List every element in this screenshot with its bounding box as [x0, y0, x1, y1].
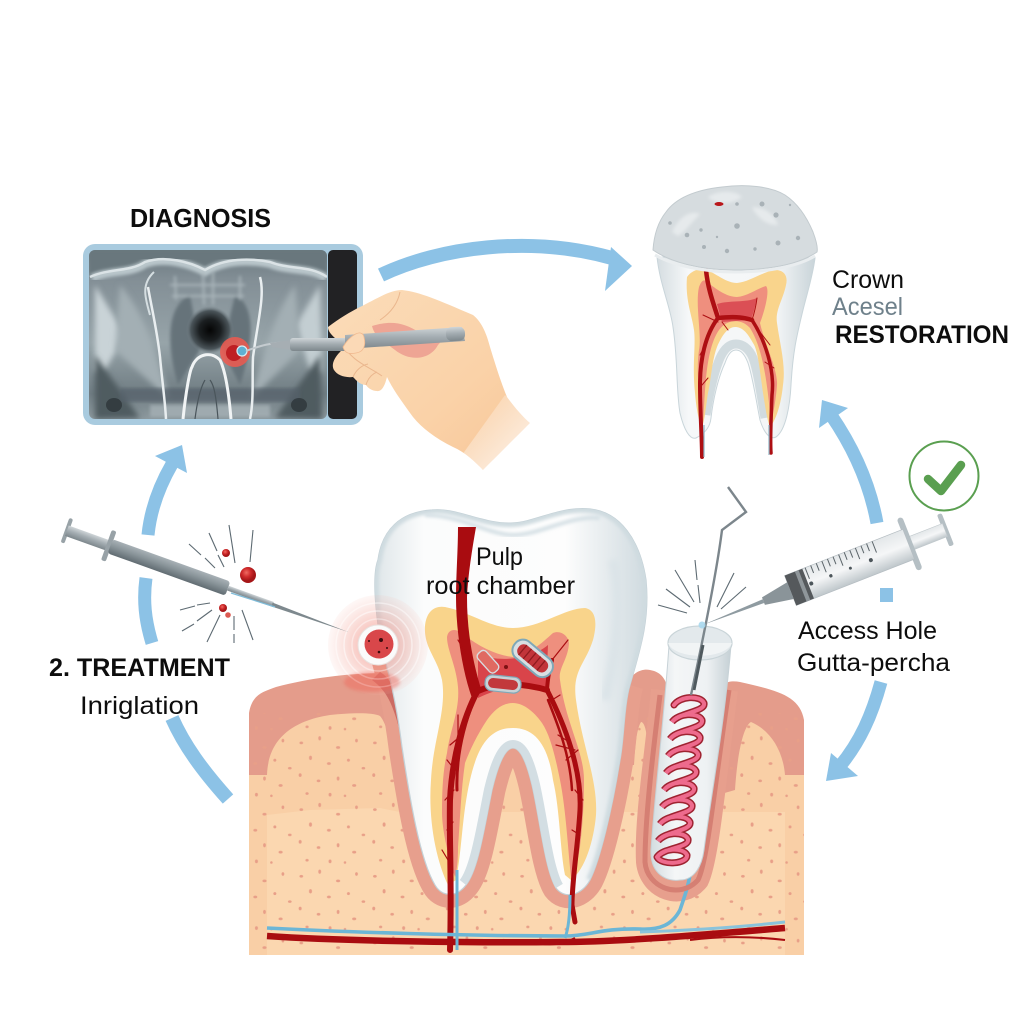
- arrow: lower right toward gum: [826, 682, 881, 781]
- text: crown labels: Acesel: [832, 293, 903, 321]
- inner grey arch: [706, 344, 765, 418]
- bacteria: [476, 636, 557, 694]
- text: access hole and gutta-percha: Gutta-percha: [797, 649, 950, 677]
- lesion marker: [220, 337, 250, 367]
- tooth body: [657, 257, 815, 438]
- text: crown labels: [832, 266, 1009, 349]
- x-ray image: [89, 250, 327, 419]
- tube gum socket rim: [645, 690, 729, 890]
- gum band around tooth roots: [385, 660, 630, 895]
- pulp: [698, 280, 777, 424]
- furcation grey edge: [466, 748, 556, 888]
- text: pulp and root chamber: Pulp: [476, 543, 523, 571]
- arrow: treatment to diagnosis: [145, 445, 228, 799]
- palm shadow: [372, 323, 442, 358]
- tooth outline: [375, 509, 647, 895]
- gutta-percha coil: [657, 698, 704, 863]
- text: access hole and gutta-percha: Access Hole: [798, 617, 937, 645]
- finger creases: [342, 292, 400, 385]
- apex blue tips: [704, 425, 769, 457]
- wrist fade: [462, 395, 545, 482]
- thumb: [343, 333, 365, 353]
- hand: [328, 290, 530, 470]
- illustration: irrigation syringe: [60, 515, 354, 647]
- illustration: filling syringe: [693, 503, 958, 651]
- root canals: [700, 270, 774, 457]
- tube socket gum: [647, 690, 727, 890]
- bone: [249, 713, 804, 955]
- bone speckles: [249, 713, 804, 955]
- lower bone layer: [267, 808, 785, 955]
- pulp chamber shade: [717, 298, 757, 322]
- crown cap: [653, 186, 817, 270]
- dental probe: [246, 326, 465, 351]
- panel: tooth cross-section in gum and bone: [249, 509, 804, 955]
- pulp chamber core: [478, 645, 548, 698]
- gum: [249, 670, 804, 955]
- text: crown labels: RESTORATION: [835, 321, 1009, 349]
- root canal tube: [651, 626, 732, 880]
- title: diagnosis: DIAGNOSIS: [130, 203, 271, 233]
- text: pulp and root chamber: [426, 543, 575, 600]
- text: treatment label: [49, 654, 230, 720]
- illustration: hand holding dental probe: [246, 290, 545, 482]
- inflamed abscess with target rings: [328, 595, 428, 695]
- cap highlights and pits: [668, 192, 800, 253]
- arrow: diagnosis to restoration: [381, 246, 632, 291]
- icon: success check mark: [910, 442, 978, 510]
- dentin: [687, 269, 787, 427]
- text: pulp and root chamber: root chamber: [426, 572, 575, 600]
- arrow: access hole to restoration: [819, 400, 893, 602]
- enamel shading: [375, 509, 647, 888]
- blue nerve lines and artery: [267, 868, 785, 950]
- text: treatment label: Inriglation: [80, 692, 199, 720]
- film edge strip: [328, 250, 357, 419]
- illustration: dental explorer probe: [691, 487, 746, 695]
- x-ray frame: [83, 244, 363, 425]
- gum groove: [372, 672, 404, 748]
- text: treatment label: 2. TREATMENT: [49, 654, 230, 682]
- panel: restored crown tooth: [653, 186, 817, 457]
- text: crown labels: Crown: [832, 266, 904, 294]
- panel: diagnosis x-ray: [83, 244, 363, 425]
- pulp: [442, 630, 584, 877]
- text: access hole and gutta-percha: [797, 617, 950, 677]
- dentin: [425, 607, 596, 885]
- icon: sparks at access hole: [658, 560, 746, 628]
- icon: droplets and sparks: [180, 525, 256, 643]
- root canals and vessels: [442, 527, 583, 950]
- furcation gum thickening: [480, 750, 546, 850]
